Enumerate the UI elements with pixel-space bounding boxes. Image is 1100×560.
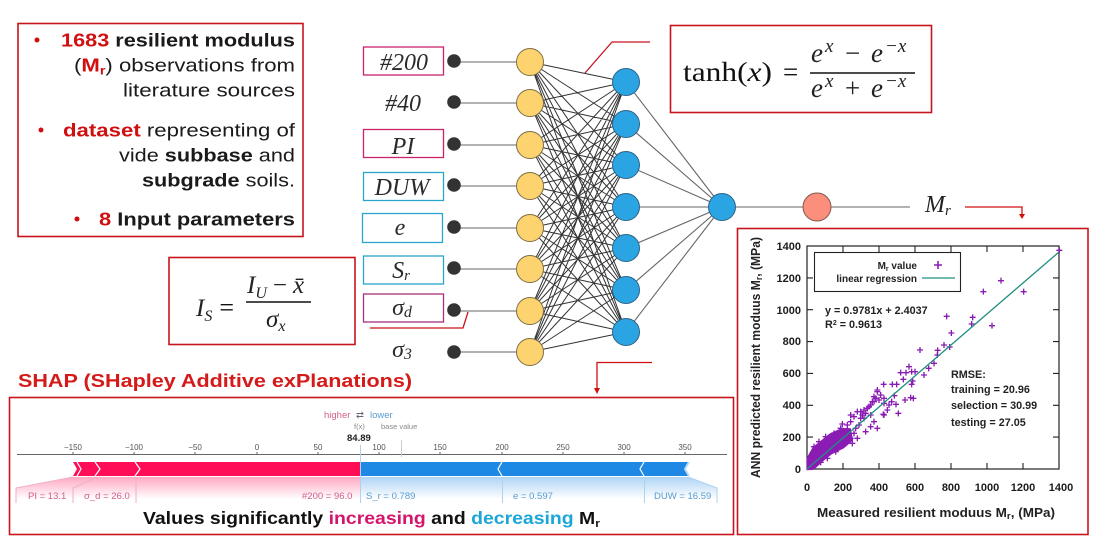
connector: standardization to inputs bbox=[370, 312, 468, 328]
bullet: dataset: vide subbase and bbox=[119, 144, 295, 166]
formula: tanh activation: + bbox=[845, 73, 860, 103]
RMSE values: selection = 30.99 bbox=[951, 400, 1037, 412]
x axis title: r bbox=[1007, 511, 1011, 521]
bullet: observations bbox=[34, 30, 295, 100]
caption: r bbox=[595, 518, 601, 530]
formula: standardization: U bbox=[255, 285, 268, 302]
bullet: dataset bbox=[38, 120, 296, 190]
formula: tanh activation: tanh( x) bbox=[683, 57, 772, 87]
axis: 0 bbox=[255, 443, 260, 452]
axis: 50 bbox=[314, 443, 323, 452]
input labels: #200 bbox=[380, 50, 428, 76]
formula: standardization: = bbox=[219, 293, 234, 322]
feature labels: PI = 13.1 bbox=[28, 491, 66, 502]
input labels: #40 bbox=[385, 91, 421, 117]
legend: higher lower: f(x) bbox=[354, 422, 365, 431]
feature labels: #200 = 96.0 bbox=[302, 491, 352, 502]
legend: r bbox=[886, 266, 889, 273]
input labels: e bbox=[395, 215, 406, 241]
input labels bbox=[362, 47, 444, 363]
y tick labels: 400 bbox=[783, 400, 801, 412]
caption: Values significantly increasing and decreasing M bbox=[143, 508, 593, 528]
bar: decreasing bbox=[361, 462, 690, 476]
bullet: observations: literature sources bbox=[123, 80, 295, 100]
axis: 250 bbox=[556, 443, 570, 452]
input labels: r bbox=[404, 268, 410, 284]
connections: inputs and output bbox=[454, 62, 910, 352]
formula: tanh activation: e bbox=[811, 38, 823, 68]
y tick labels: 1400 bbox=[777, 241, 801, 253]
panel: SHAP force plot bbox=[10, 398, 734, 534]
output node bbox=[803, 193, 831, 221]
separators bbox=[16, 477, 136, 503]
y tick labels: 1200 bbox=[777, 273, 801, 285]
input labels: PI bbox=[391, 134, 415, 160]
regression equation: = 0.9613 bbox=[837, 319, 882, 331]
RMSE values: training = 20.96 bbox=[951, 384, 1030, 396]
x tick labels: 1000 bbox=[975, 482, 999, 494]
formula: tanh activation: x bbox=[824, 71, 834, 92]
input dots bbox=[447, 54, 461, 359]
y axis title: r bbox=[754, 276, 764, 280]
legend: higher lower: 84.89 bbox=[347, 433, 371, 444]
feature labels: σ_d = 26.0 bbox=[84, 491, 130, 502]
bullet: input parameters: 8 Input parameters bbox=[99, 208, 295, 230]
y tick labels bbox=[777, 241, 801, 476]
legend bbox=[814, 252, 960, 292]
gradients under bars bbox=[16, 477, 717, 503]
x tick labels: 800 bbox=[942, 482, 960, 494]
bullet: observations: 1683 resilient modulus bbox=[61, 30, 295, 50]
legend: value bbox=[889, 261, 917, 272]
formula: tanh activation: −x bbox=[885, 36, 907, 57]
y axis title: ANN predicted resilient moduus M bbox=[749, 274, 763, 478]
formula: tanh activation: −x bbox=[885, 71, 907, 92]
x tick labels: 1200 bbox=[1011, 482, 1035, 494]
y axis title: , (MPa) bbox=[749, 237, 763, 277]
input labels: S bbox=[392, 258, 404, 284]
arrow: output to scatter plot bbox=[965, 207, 1025, 219]
connector: tanh to hidden layer bbox=[585, 42, 650, 73]
legend: higher lower bbox=[324, 410, 417, 444]
feature labels: S_r = 0.789 bbox=[366, 491, 415, 502]
y tick labels: 200 bbox=[783, 432, 801, 444]
formula: standardization: x bbox=[277, 318, 285, 335]
formula: standardization: I bbox=[196, 295, 204, 322]
y tick labels: 0 bbox=[795, 464, 801, 476]
RMSE values: testing = 27.05 bbox=[951, 417, 1026, 429]
input layer nodes bbox=[516, 48, 544, 366]
formula: standardization: σ bbox=[266, 306, 278, 333]
connections: input to hidden bbox=[530, 62, 626, 352]
formula: tanh activation: e bbox=[871, 73, 883, 103]
axis: 350 bbox=[678, 443, 692, 452]
x axis title: Measured resilient moduus M bbox=[817, 506, 993, 520]
axis: −50 bbox=[188, 443, 202, 452]
x tick labels: 200 bbox=[834, 482, 852, 494]
output label: r bbox=[945, 203, 951, 219]
input labels: d bbox=[404, 304, 413, 321]
feature labels: e = 0.597 bbox=[513, 491, 553, 502]
arrow: network to SHAP bbox=[594, 362, 652, 394]
regression equation: y = 0.9781x + 2.4037 bbox=[825, 305, 928, 317]
bullet: observations: ) observations from bbox=[105, 54, 295, 76]
panel: scatter plot bbox=[738, 228, 1088, 534]
input labels: σ bbox=[392, 295, 404, 321]
plot frame bbox=[807, 246, 1059, 469]
legend: higher lower: base value bbox=[381, 422, 417, 431]
formula: tanh activation: − bbox=[845, 38, 860, 68]
legend: higher lower: higher bbox=[324, 410, 350, 421]
feature labels bbox=[28, 491, 711, 502]
y tick labels: 600 bbox=[783, 368, 801, 380]
axis: −150 bbox=[64, 443, 83, 452]
x axis title: , (MPa) bbox=[1011, 506, 1055, 520]
input labels: DUW bbox=[374, 175, 431, 201]
formula: standardization: x̄ bbox=[292, 272, 304, 299]
axis: −100 bbox=[125, 443, 144, 452]
regression line bbox=[807, 252, 1059, 469]
axis: 100 bbox=[372, 443, 386, 452]
x tick labels: 0 bbox=[804, 482, 810, 494]
axis: 200 bbox=[495, 443, 509, 452]
regression equation: R bbox=[825, 319, 833, 331]
feature labels: DUW = 16.59 bbox=[654, 491, 711, 502]
formula: standardization bbox=[169, 258, 355, 344]
formula: tanh activation: = bbox=[783, 57, 798, 87]
legend: higher lower: ⇄ bbox=[356, 410, 364, 421]
bar: increasing bbox=[73, 462, 360, 476]
output label: M bbox=[925, 192, 945, 218]
axis: 300 bbox=[617, 443, 631, 452]
axis: 150 bbox=[433, 443, 447, 452]
regression equation bbox=[825, 305, 928, 331]
y tick labels: 1000 bbox=[777, 305, 801, 317]
axis bbox=[17, 440, 727, 457]
hidden layer nodes bbox=[612, 68, 640, 346]
heading: SHAP: SHAP (SHapley Additive exPlanations) bbox=[18, 370, 412, 391]
input labels: σ bbox=[392, 337, 404, 363]
x tick labels bbox=[804, 482, 1073, 494]
x tick labels: 400 bbox=[870, 482, 888, 494]
formula: standardization: − bbox=[273, 272, 287, 299]
bullet: observations: (M bbox=[74, 54, 97, 76]
RMSE values: RMSE: bbox=[951, 369, 986, 381]
formula: standardization: I bbox=[247, 272, 255, 299]
formula: tanh activation bbox=[670, 26, 932, 112]
diagram: neural network bbox=[447, 48, 951, 366]
scatter points bbox=[807, 248, 1062, 469]
y tick labels: 800 bbox=[783, 336, 801, 348]
x tick labels: 1400 bbox=[1049, 482, 1073, 494]
x tick labels: 600 bbox=[906, 482, 924, 494]
RMSE values bbox=[951, 369, 1037, 429]
legend: M bbox=[878, 261, 886, 272]
formula: tanh activation: x bbox=[824, 36, 834, 57]
second hidden node bbox=[708, 194, 736, 220]
panel: dataset summary bbox=[18, 24, 303, 236]
formula: tanh activation: e bbox=[811, 73, 823, 103]
regression equation: 2 bbox=[833, 320, 837, 327]
bullet: observations: r bbox=[100, 64, 106, 78]
formula: tanh activation: e bbox=[871, 38, 883, 68]
bullet: dataset: subgrade soils. bbox=[142, 170, 295, 190]
formula: standardization: S bbox=[204, 308, 212, 325]
legend: linear regression bbox=[836, 274, 917, 285]
legend: higher lower: lower bbox=[370, 410, 393, 421]
bullet: dataset: dataset representing of bbox=[63, 120, 296, 140]
input labels: 3 bbox=[403, 346, 412, 363]
